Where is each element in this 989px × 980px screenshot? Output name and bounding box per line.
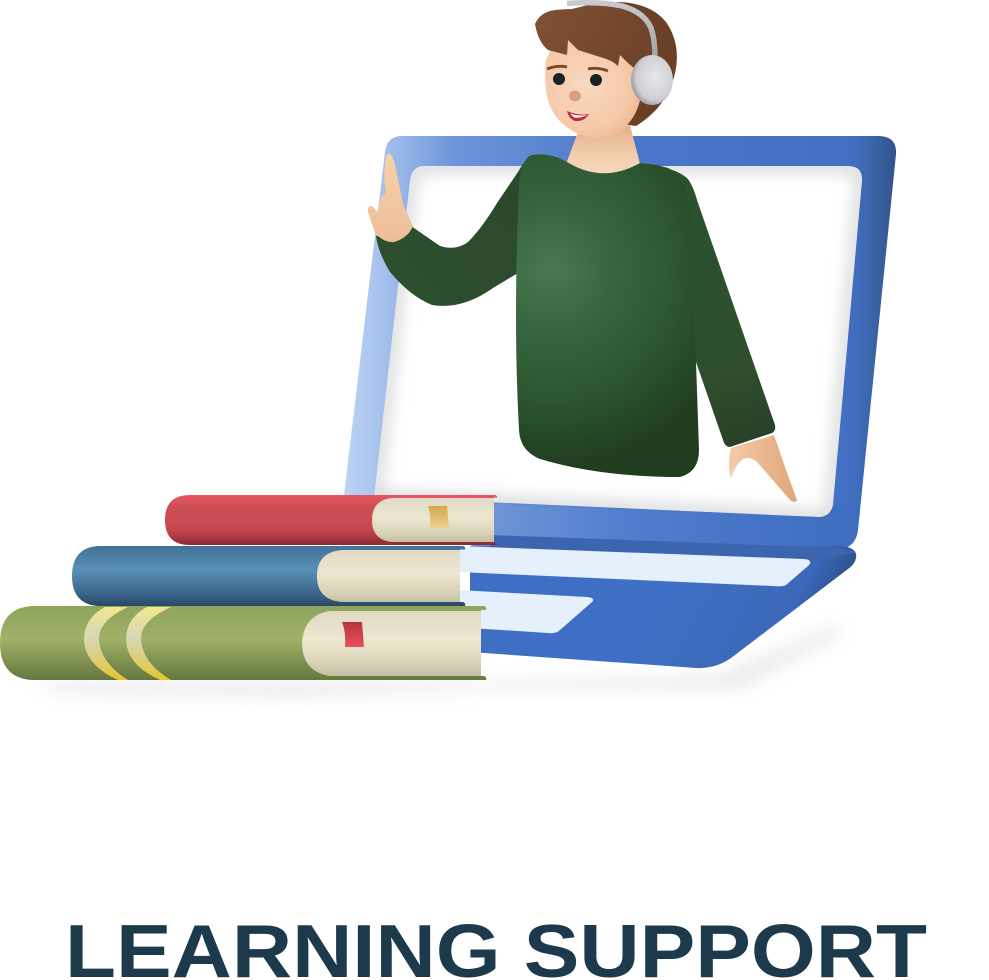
sweater body bbox=[516, 154, 699, 477]
face bbox=[545, 30, 640, 138]
right hand bbox=[729, 435, 797, 502]
mouth bbox=[567, 111, 589, 121]
laptop trackpad bbox=[458, 590, 593, 633]
eyebrows bbox=[547, 66, 608, 71]
hair bbox=[535, 2, 654, 68]
laptop bbox=[344, 136, 896, 668]
laptop hinge strip bbox=[490, 504, 856, 547]
laptop keyboard bbox=[458, 546, 810, 586]
back of hair bbox=[615, 2, 677, 126]
laptop screen bbox=[374, 166, 862, 517]
right sleeve bbox=[655, 167, 775, 447]
books bbox=[0, 495, 497, 680]
left sleeve bbox=[376, 157, 532, 306]
laptop lid bbox=[344, 136, 896, 549]
headset ear cup bbox=[631, 55, 673, 105]
blue book bbox=[72, 546, 465, 606]
nose bbox=[569, 90, 581, 102]
eyes bbox=[553, 73, 602, 86]
ground shadow bbox=[30, 626, 846, 698]
left hand bbox=[368, 153, 413, 242]
laptop base bbox=[470, 546, 856, 668]
red book bbox=[165, 495, 497, 545]
headset band bbox=[567, 3, 655, 58]
person bbox=[368, 2, 797, 502]
green book bbox=[0, 606, 486, 680]
neck bbox=[566, 125, 640, 175]
